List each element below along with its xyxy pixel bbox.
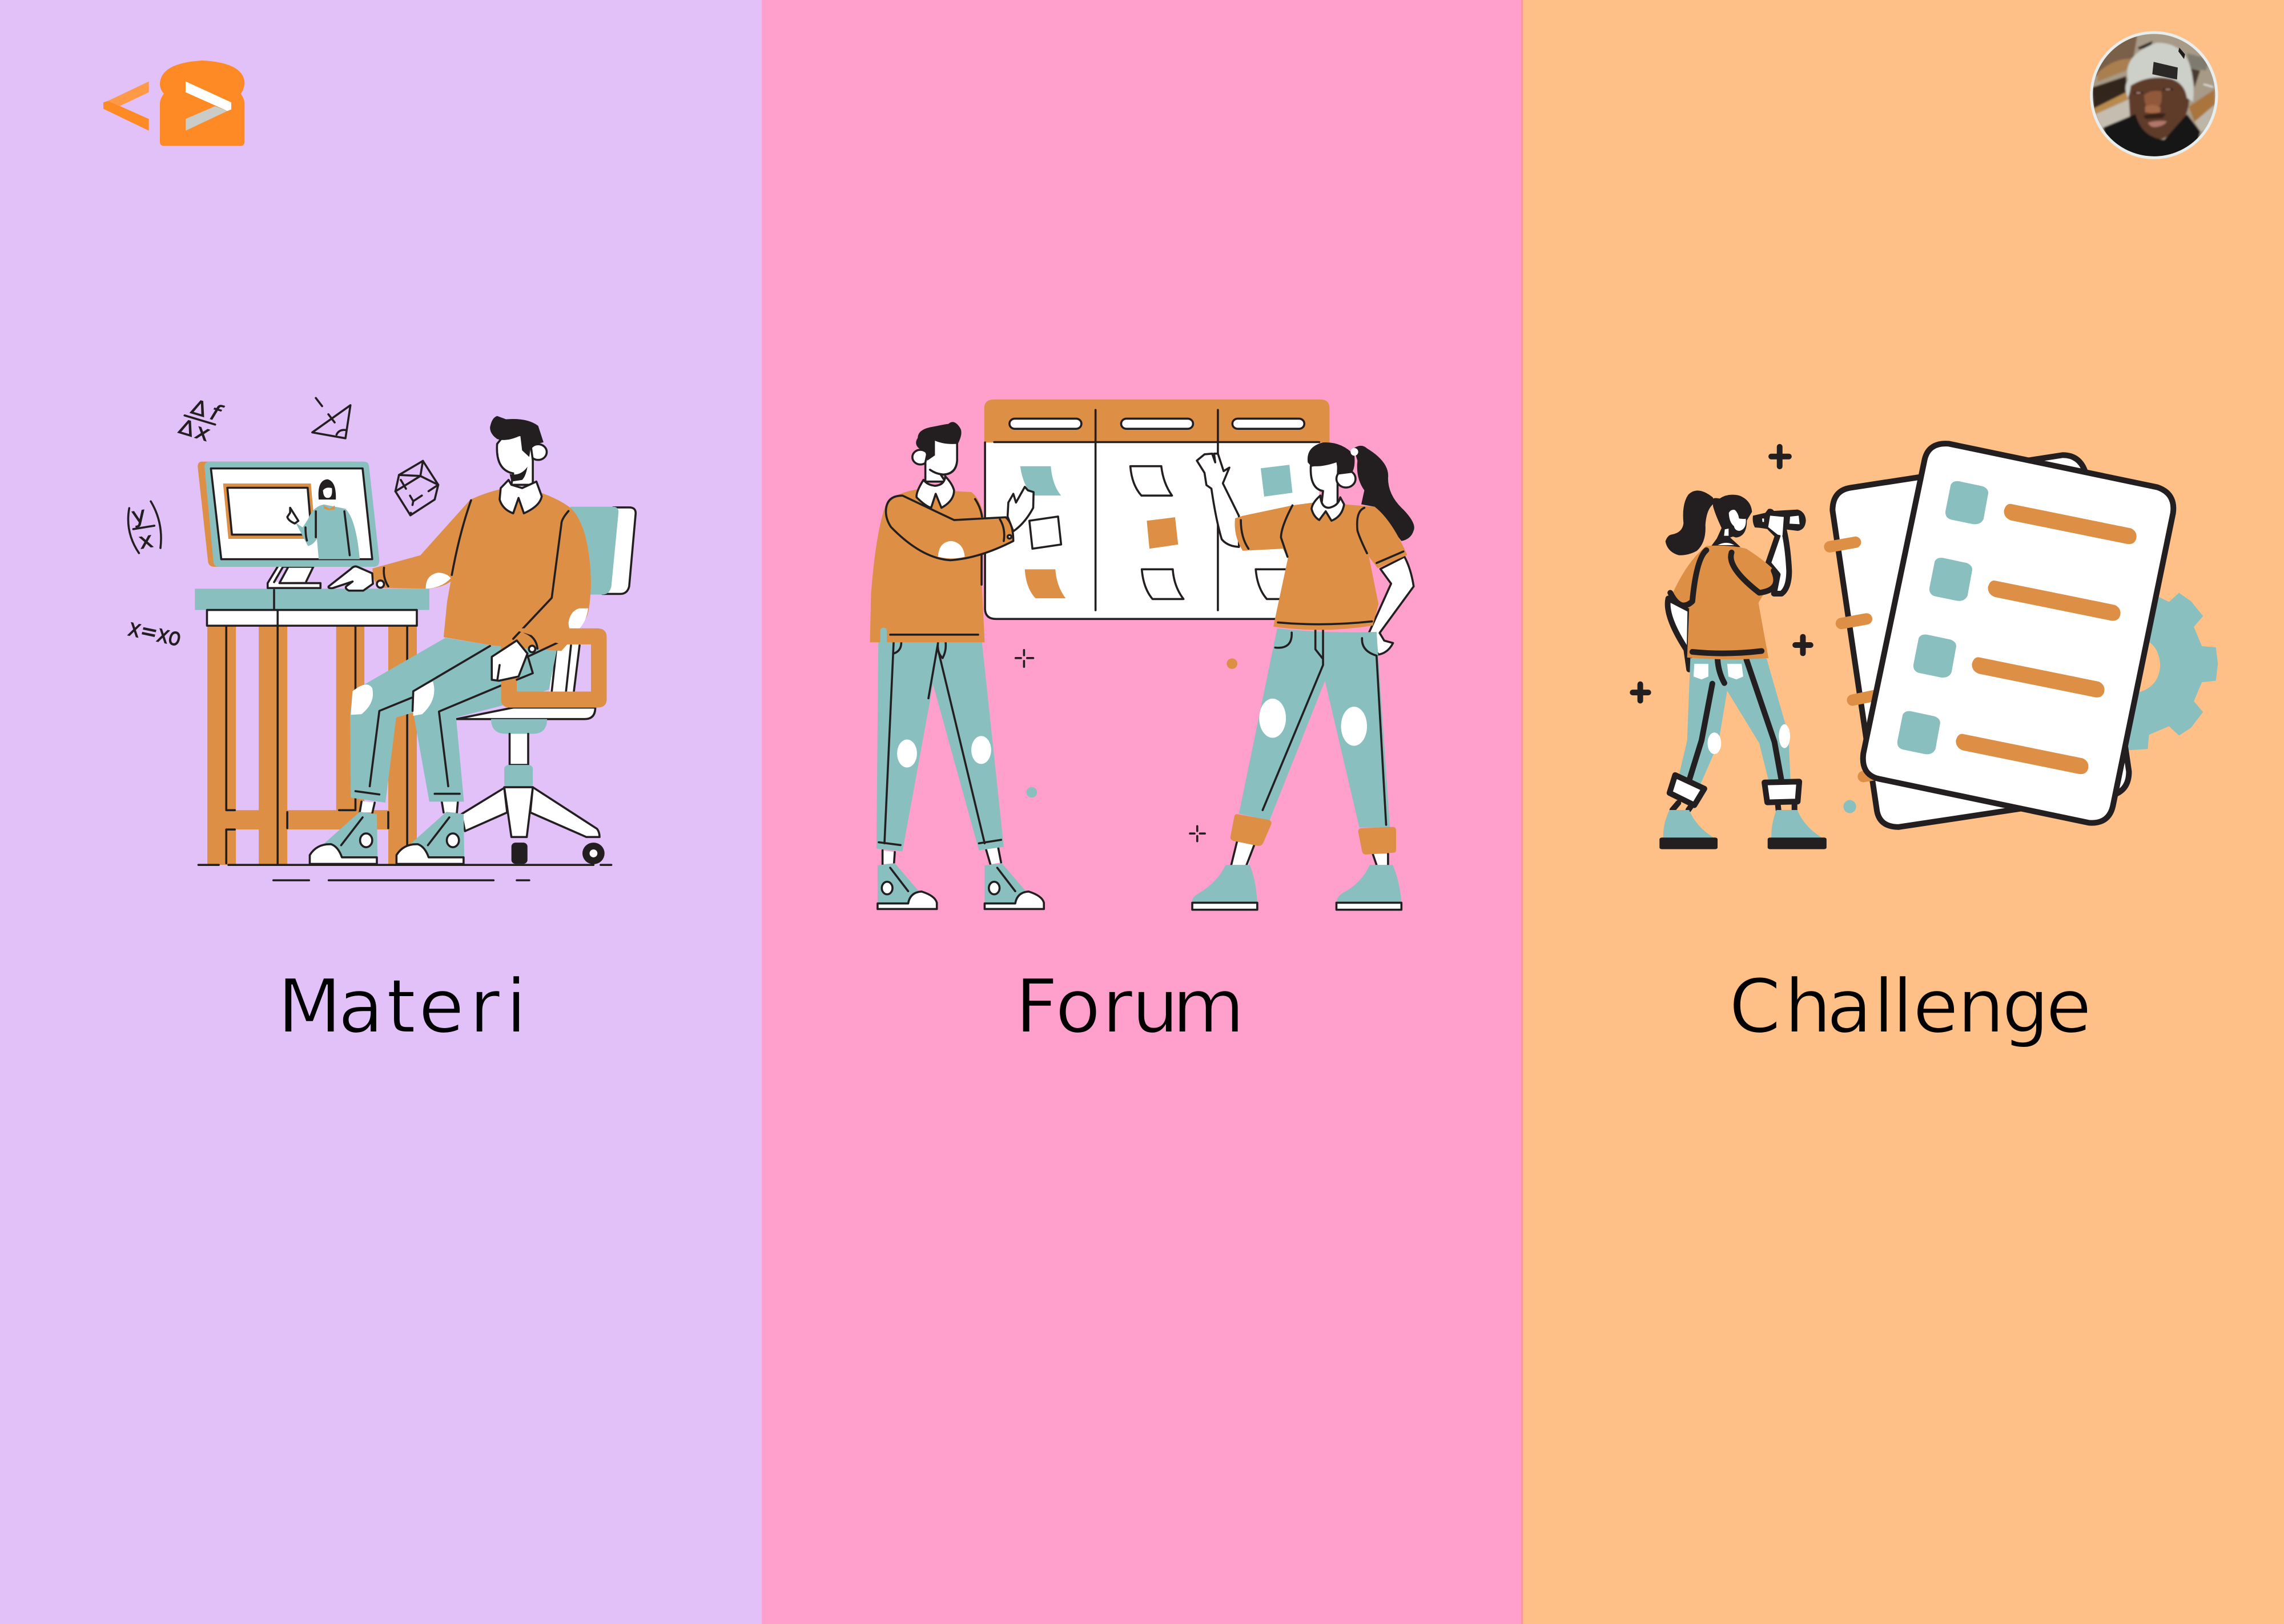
math note: delta f over delta x: Δ xyxy=(188,394,211,422)
woman standing xyxy=(1192,442,1414,910)
title: Forum: Forum xyxy=(1015,963,1245,1050)
checklist row 4 xyxy=(1897,711,2088,774)
front checklist page xyxy=(1863,444,2173,823)
math note: delta f over delta x: f xyxy=(207,400,226,427)
computer monitor with teacher on screen xyxy=(198,462,379,588)
panel: challenge background xyxy=(1523,0,2284,1624)
illustration: man studying at computer xyxy=(126,394,637,881)
plus sign xyxy=(1771,447,1789,466)
checklist row 1 xyxy=(1945,481,2137,544)
man: hands xyxy=(328,566,533,681)
math note: y over x in brackets: y xyxy=(130,502,148,529)
teacher figure on screen xyxy=(287,479,360,559)
panel: forum background xyxy=(762,0,1523,1624)
gear xyxy=(2091,590,2218,751)
man: orange sweater xyxy=(372,489,591,657)
title: Challenge: Challenge xyxy=(1729,963,2092,1050)
teal dot xyxy=(1026,787,1037,797)
math note: delta f over delta x xyxy=(175,393,226,448)
woman's shoes xyxy=(1192,865,1401,910)
man: trousers and shoes xyxy=(309,638,557,864)
woman's ponytail xyxy=(1354,446,1414,541)
sticky notes xyxy=(1020,465,1297,599)
avatar: profile photo in circle xyxy=(2090,31,2218,159)
math note: x equals x zero: x=xo xyxy=(126,614,184,652)
armrest xyxy=(501,628,606,708)
spiral binding tabs xyxy=(1829,542,1875,776)
math note: wireframe cube xyxy=(395,461,439,515)
back notebook page xyxy=(1829,455,2129,827)
checklist row 3 xyxy=(1913,634,2105,698)
desk xyxy=(195,589,429,865)
plus sign xyxy=(1795,637,1811,653)
boots xyxy=(1659,810,1827,849)
woman's head and collar xyxy=(1308,442,1358,521)
woman with binoculars xyxy=(1659,490,1827,849)
sparkle xyxy=(1190,826,1205,841)
woman's trousers xyxy=(1231,628,1396,865)
illustration: two people at task board xyxy=(870,400,1415,911)
teal dot xyxy=(1843,800,1856,813)
checklist row 2 xyxy=(1929,558,2121,621)
math note: delta f over delta x: x xyxy=(192,419,214,446)
woman's orange top xyxy=(1235,502,1407,630)
board header slots xyxy=(1010,418,1304,429)
sparkle xyxy=(1016,650,1033,667)
man's shoes xyxy=(878,863,1044,909)
chair xyxy=(456,507,636,864)
head, arm and binoculars xyxy=(1666,490,1806,594)
orange dot xyxy=(1227,658,1237,669)
math note: triangle sketch xyxy=(312,398,351,438)
woman's raised arm and hand xyxy=(1197,454,1239,547)
floor lines xyxy=(199,865,612,880)
panel: materi background xyxy=(0,0,762,1624)
title: Materi: Materi xyxy=(278,963,526,1050)
orange top xyxy=(1670,546,1777,659)
woman's hip arm xyxy=(1367,557,1414,655)
man's head xyxy=(912,422,962,508)
illustration: woman with binoculars and checklist xyxy=(1630,441,2218,849)
kanban board xyxy=(984,400,1329,619)
math note: delta f over delta x: Δ xyxy=(176,414,199,442)
plus sign xyxy=(1632,684,1648,701)
man's arm and hand xyxy=(886,487,1034,560)
math note: y over x in brackets: x xyxy=(136,527,155,554)
math note: y over x in brackets xyxy=(124,500,165,555)
man: head and collar xyxy=(490,416,547,513)
trousers xyxy=(1670,658,1799,810)
left arm xyxy=(1668,598,1690,670)
logo: toast with code brackets xyxy=(103,61,244,146)
man standing xyxy=(870,422,1044,909)
